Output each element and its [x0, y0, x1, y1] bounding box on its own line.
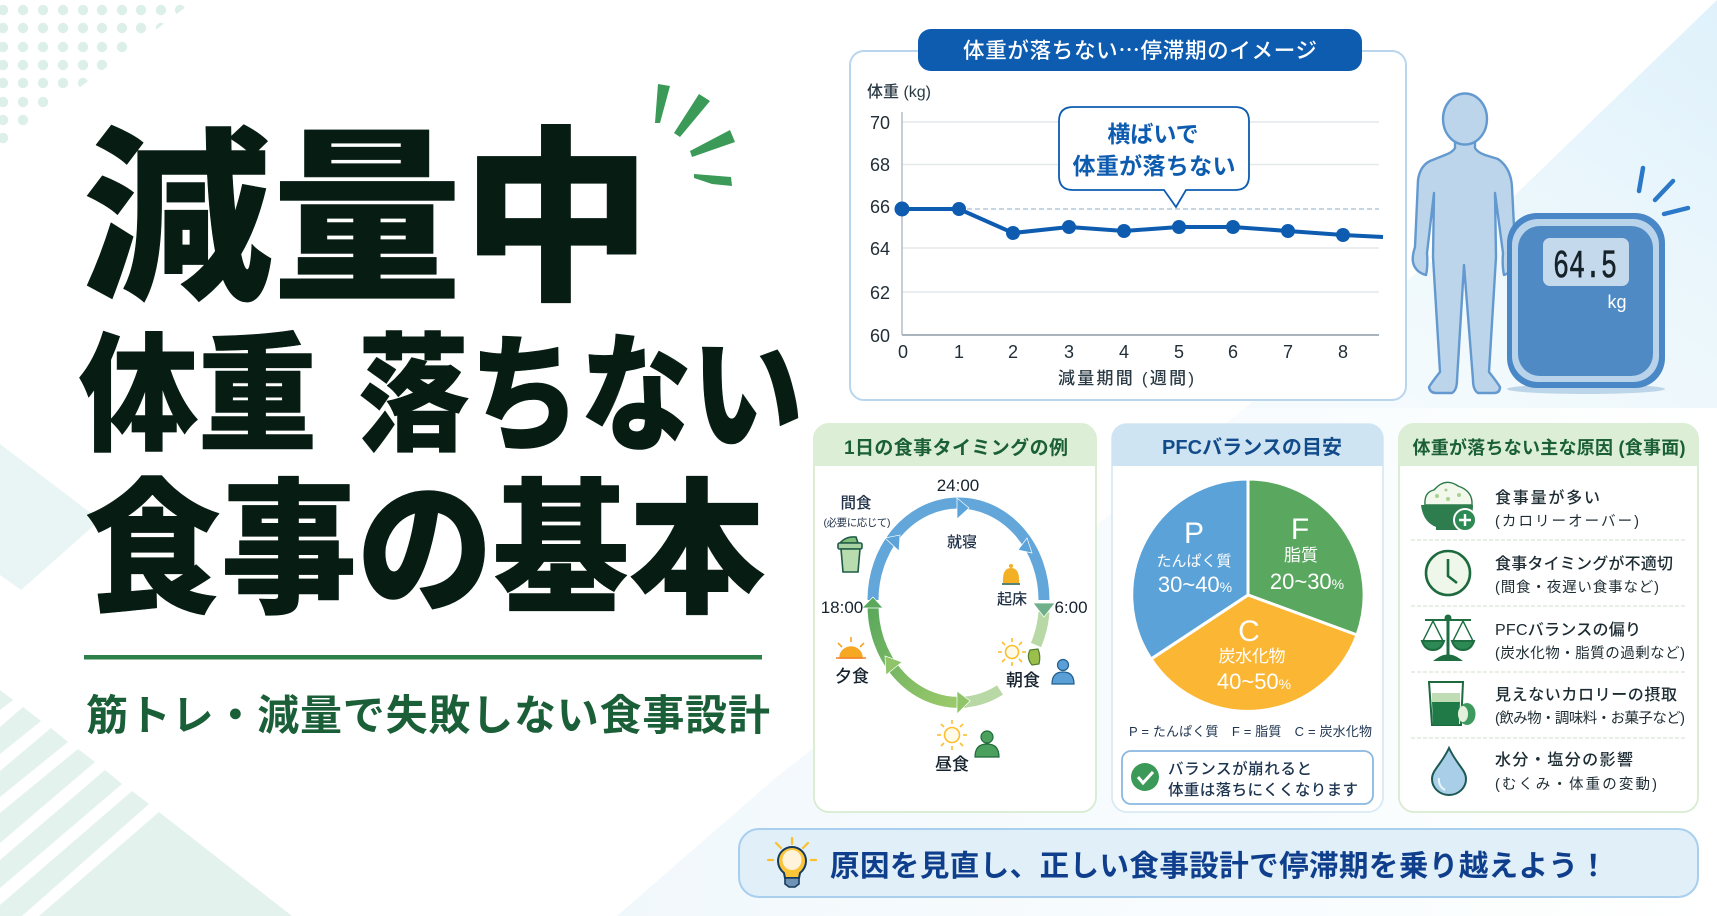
line chart: 7 [1283, 342, 1293, 362]
accent sparks [655, 84, 735, 186]
pie label: protein: たんぱく質 [1156, 552, 1232, 570]
line chart: 60 [870, 326, 890, 346]
line chart: 8 [1338, 342, 1348, 362]
ring time labels [821, 476, 1088, 617]
icon: green person [975, 731, 999, 757]
cause text: portion [1495, 488, 1639, 530]
meal timing header: 1日の食事タイミングの例 [844, 436, 1068, 459]
pie label: fat: 20~30% [1270, 569, 1344, 594]
cause text: water and salt [1495, 750, 1657, 793]
pie label: fat [1270, 513, 1344, 594]
line chart: 3 [1064, 342, 1074, 362]
icon: bathroom scale [1507, 213, 1665, 394]
line chart: 64 [870, 239, 890, 259]
banner message: 原因を見直し、正しい食事設計で停滞期を乗り越えよう！ [830, 850, 1608, 883]
ring time labels: 24:00 [937, 476, 979, 495]
PFC note box: 体重は落ちにくくなります [1168, 781, 1358, 799]
PFC header: PFCバランスの目安 [1162, 436, 1342, 459]
icon: morning sun [998, 638, 1026, 666]
cause text: timing: 食事タイミングが不適切 [1495, 554, 1673, 573]
icon: sunset [836, 637, 866, 658]
cause text: water and salt: 水分・塩分の影響 [1495, 750, 1633, 769]
icon: wake up [1002, 564, 1020, 584]
callout: 体重が落ちない [1072, 153, 1236, 179]
y axis title: 体重 (kg) [867, 83, 931, 101]
label: wake up: 起床 [997, 591, 1027, 608]
line chart: 6 [1228, 342, 1238, 362]
title divider [84, 655, 762, 660]
icon: clock [1426, 551, 1470, 595]
icon: person silhouette [1413, 94, 1516, 393]
pie label: fat: 脂質 [1284, 546, 1318, 565]
chart header: 体重が落ちない…停滞期のイメージ [963, 34, 1317, 65]
panel: plateau chart [850, 29, 1406, 400]
pie label: carbs: 40~50% [1217, 669, 1291, 694]
cause text: PFC: (炭水化物・脂質の過剰など) [1495, 644, 1685, 662]
panel: main causes [1399, 424, 1698, 812]
title [79, 115, 803, 632]
PFC legend: P = たんぱく質 F = 脂質 C = 炭水化物 [1129, 724, 1372, 739]
pie label: protein: P [1184, 517, 1204, 550]
label: bedtime: 就寝 [947, 534, 977, 551]
chart header [918, 29, 1362, 71]
cause text: timing: (間食・夜遅い食事など) [1495, 579, 1659, 596]
line chart: 1 [954, 342, 964, 362]
icon: noon sun [937, 720, 967, 750]
pie chart [1132, 479, 1364, 711]
cause text: portion: 食事量が多い [1495, 488, 1600, 507]
cause text: portion: (カロリーオーバー) [1495, 514, 1639, 530]
icon: blue person [1052, 660, 1074, 684]
label: dinner: 夕食 [835, 667, 869, 686]
PFC header [1112, 424, 1383, 466]
icon: drink [1429, 682, 1476, 725]
callout: 横ばいで [1107, 121, 1199, 147]
pie label: protein [1156, 517, 1232, 597]
title: 落ちない [358, 325, 803, 468]
ring time labels: 6:00 [1054, 598, 1088, 617]
pie label: protein: 30~40% [1158, 572, 1232, 597]
title: 減量中 [83, 115, 651, 325]
line chart: 2 [1008, 342, 1018, 362]
pie label: carbs: C [1238, 615, 1260, 648]
label: lunch: 昼食 [935, 755, 969, 774]
cause text: hidden calories: (飲み物・調味料・お菓子など) [1495, 710, 1685, 727]
ring time labels: 18:00 [821, 598, 863, 617]
line chart [870, 112, 1383, 362]
label: snack: 間食 [840, 494, 872, 512]
panel: meal timing [814, 424, 1096, 812]
pie label: carbs: 炭水化物 [1218, 647, 1286, 666]
cause text: PFC: PFCバランスの偏り [1495, 621, 1641, 639]
PFC note box [1122, 751, 1373, 804]
pie label: carbs [1217, 615, 1291, 694]
causes header [1399, 424, 1698, 466]
cause text: PFC [1495, 621, 1685, 662]
line chart: 70 [870, 113, 890, 133]
causes header: 体重が落ちない主な原因 (食事面) [1412, 437, 1686, 458]
cause text: hidden calories: 見えないカロリーの摂取 [1495, 686, 1677, 704]
icon: light bulb [768, 838, 816, 887]
callout [1059, 107, 1249, 207]
line chart: 68 [870, 155, 890, 175]
label: breakfast: 朝食 [1006, 671, 1040, 690]
bottom banner [739, 829, 1698, 897]
cause text: hidden calories [1495, 686, 1685, 727]
icon: rice bowl [1421, 482, 1476, 531]
icon: breakfast food [1028, 649, 1040, 665]
icon: shake cup [838, 537, 862, 572]
panel: PFC balance [1112, 424, 1383, 812]
icon: scale rays [1639, 168, 1688, 214]
icon: bathroom scale: 64.5 [1553, 245, 1617, 290]
line chart: 0 [898, 342, 908, 362]
line chart: 4 [1119, 342, 1129, 362]
title: 食事の基本 [85, 469, 765, 632]
label: snack: (必要に応じて) [824, 516, 890, 529]
x axis title: 減量期間 (週間) [1058, 369, 1194, 388]
icon: water drop [1432, 748, 1466, 795]
icon: bathroom scale: kg [1607, 292, 1627, 312]
PFC note box: バランスが崩れると [1168, 759, 1312, 778]
label: snack [824, 494, 890, 529]
title: 体重 [79, 325, 317, 468]
line chart: 62 [870, 283, 890, 303]
line chart: 5 [1174, 342, 1184, 362]
icon: balance scale [1422, 616, 1474, 660]
cycle ring [862, 498, 1055, 714]
line chart: 66 [870, 197, 890, 217]
cause text: timing [1495, 554, 1673, 596]
meal timing header [814, 424, 1096, 466]
subtitle: 筋トレ・減量で失敗しない食事設計 [86, 692, 770, 739]
icon: check [1131, 763, 1159, 791]
cause text: water and salt: (むくみ・体重の変動) [1495, 776, 1657, 793]
pie label: fat: F [1291, 513, 1309, 546]
